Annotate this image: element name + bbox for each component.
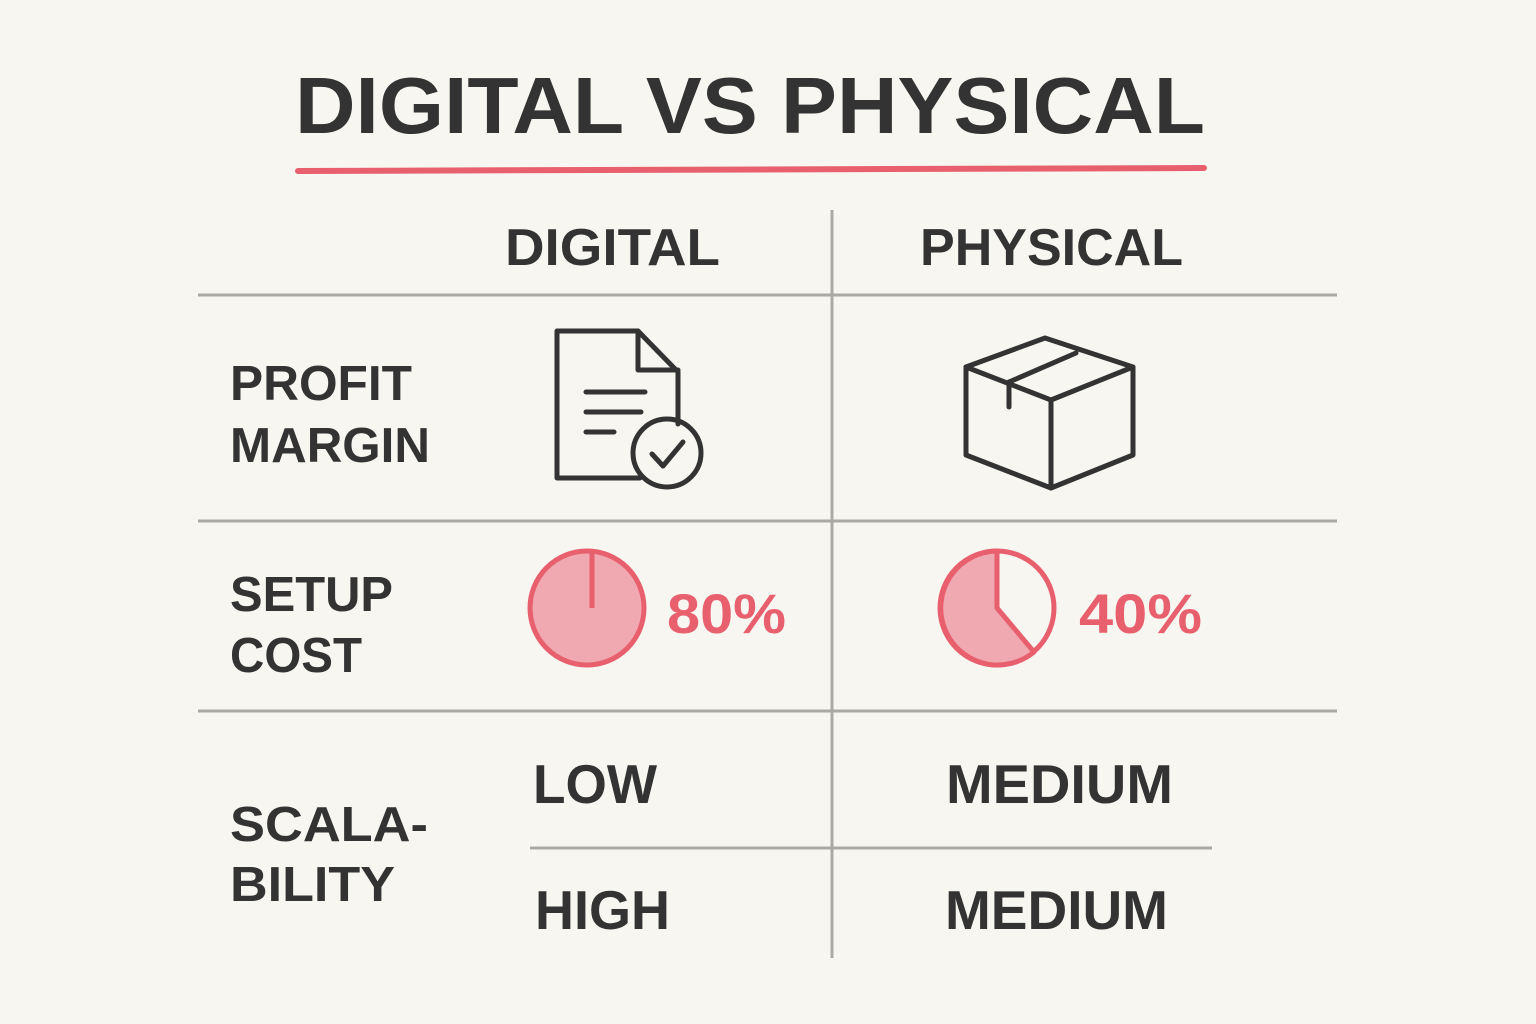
row label: scalability	[230, 798, 428, 912]
pie chart: digital 80%: 80%	[667, 582, 786, 645]
row label: setup cost: SETUP	[230, 568, 393, 622]
icon: box	[966, 338, 1133, 488]
physical scalability values: MEDIUM	[946, 753, 1173, 815]
column header: physical: PHYSICAL	[920, 219, 1183, 277]
pie chart: physical 40%: 40%	[1079, 582, 1202, 645]
physical scalability values: MEDIUM	[945, 879, 1168, 941]
physical scalability values	[945, 753, 1173, 941]
digital scalability values: HIGH	[535, 879, 670, 941]
column header: digital: DIGITAL	[505, 219, 720, 277]
row label: setup cost: COST	[230, 629, 362, 683]
row label: profit margin: MARGIN	[230, 419, 430, 473]
row label: setup cost	[230, 568, 393, 683]
icon: document with check	[557, 331, 701, 487]
row label: scalability: BILITY	[230, 858, 395, 912]
row label: profit margin	[230, 357, 430, 473]
grid lines	[198, 210, 1337, 958]
pie chart: physical 40%	[940, 551, 1202, 665]
digital scalability values	[533, 753, 670, 941]
digital scalability values: LOW	[533, 753, 657, 815]
row label: profit margin: PROFIT	[230, 357, 412, 411]
row label: scalability: SCALA-	[230, 798, 428, 852]
pie chart: digital 80%	[530, 551, 786, 665]
title: DIGITAL VS PHYSICAL	[295, 61, 1205, 150]
